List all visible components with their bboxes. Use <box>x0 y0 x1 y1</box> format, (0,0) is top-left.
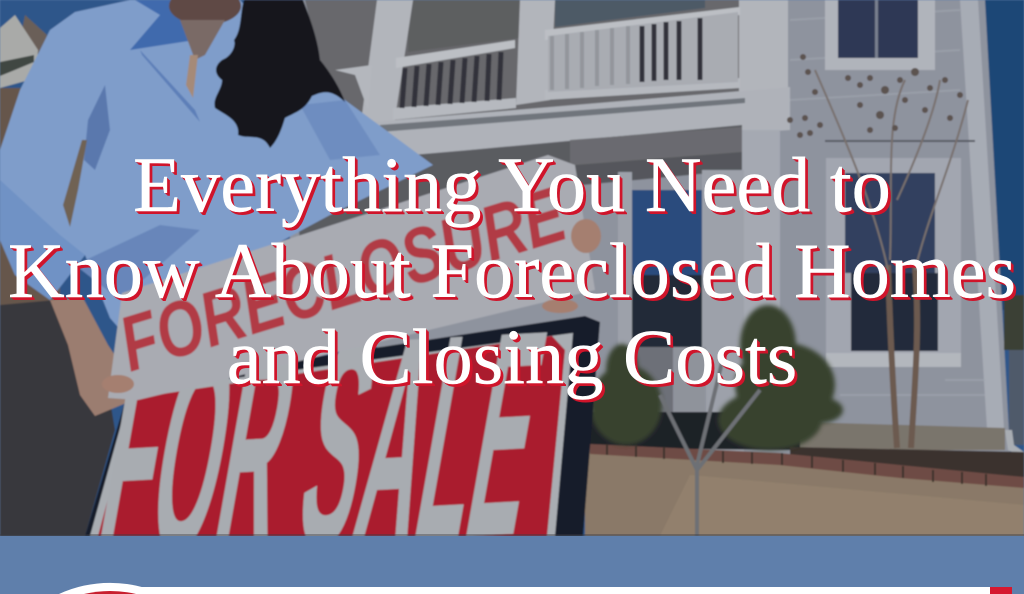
foreclosure rider sign <box>108 155 595 400</box>
hands on sign <box>102 219 601 393</box>
bare tree <box>660 70 968 536</box>
mulch bed <box>790 447 1024 478</box>
lower right window <box>825 140 975 367</box>
siding lines <box>790 10 985 395</box>
dark foundation <box>585 412 1005 450</box>
for sale sign frame <box>85 316 600 536</box>
title: Everything You Need to <box>133 141 891 228</box>
porch ceiling shadow <box>295 125 742 245</box>
title: and Closing Costs <box>227 313 797 400</box>
porch columns <box>360 0 788 130</box>
title <box>8 141 1016 402</box>
woman: forearm and hand <box>50 298 138 416</box>
neighbour house at far left <box>0 15 60 338</box>
upper porch interior <box>305 0 785 125</box>
next section header bar with circle badge and red tab <box>59 582 1012 594</box>
brick edging <box>590 444 1024 488</box>
porch beam <box>335 87 790 165</box>
tree foliage specks <box>787 54 963 138</box>
lower porch window <box>618 190 706 445</box>
dark overlay edge line <box>0 534 1024 536</box>
woman: trousers <box>0 300 115 536</box>
upper railing <box>335 7 740 120</box>
lower porch column <box>618 130 780 460</box>
lawn <box>585 450 1024 536</box>
woman: wedge of background beside arm <box>63 140 87 227</box>
title: Know About Foreclosed Homes <box>8 227 1016 314</box>
shrubs <box>590 305 843 450</box>
house wall <box>290 0 1024 460</box>
woman: shirt <box>0 0 433 335</box>
woman: hair <box>214 0 345 148</box>
woman: chin and neck <box>169 0 241 98</box>
upper right window <box>825 0 935 70</box>
foreclosure rider lettering: FORECLOSURE <box>109 169 577 388</box>
